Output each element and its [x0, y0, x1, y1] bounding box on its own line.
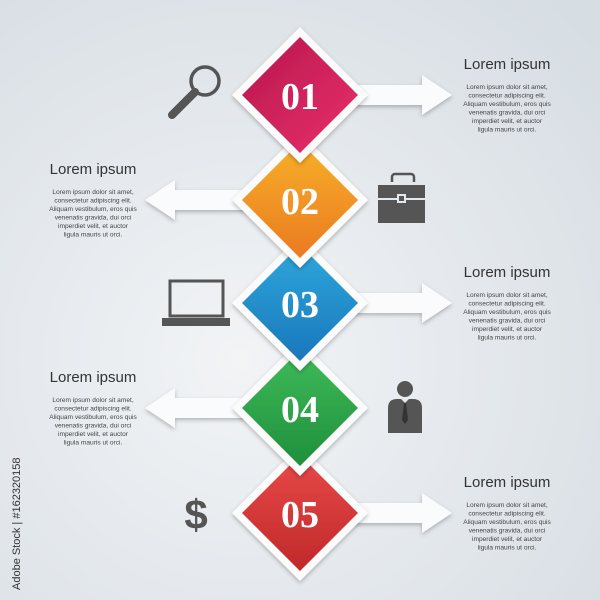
- text block 2: imperdiet velit, et auctor: [58, 223, 129, 230]
- text block 1: Lorem ipsum: [464, 56, 550, 73]
- text block 2: Aliquam vestibulum, eros quis: [49, 206, 137, 213]
- text block 3: venenatis gravida, dui orci: [469, 318, 546, 324]
- icon: magnifier: [172, 67, 219, 115]
- text block 1: consectetur adipiscing elit.: [468, 92, 546, 100]
- text block 1: ligula mauris ut orci.: [478, 126, 536, 134]
- arrow 3 right: [350, 283, 452, 323]
- diamond 02: [232, 132, 368, 268]
- text block 5: consectetur adipiscing elit.: [468, 510, 546, 518]
- text block 3: Lorem ipsum dolor sit amet,: [466, 292, 548, 299]
- text block 1: Lorem ipsum dolor sit amet,: [466, 84, 548, 91]
- text block 5: imperdiet velit, et auctor: [472, 536, 543, 543]
- diamond 04: [232, 340, 368, 476]
- text block 1: Aliquam vestibulum, eros quis: [463, 101, 551, 108]
- text block 4: consectetur adipiscing elit.: [54, 406, 132, 412]
- text block 4: [49, 369, 137, 446]
- text block 1: venenatis gravida, dui orci: [469, 110, 546, 116]
- text block 4: Lorem ipsum: [50, 369, 136, 386]
- text block 4: imperdiet velit, et auctor: [58, 431, 129, 438]
- text block 4: Aliquam vestibulum, eros quis: [49, 414, 137, 421]
- text block 3: [463, 264, 551, 342]
- watermark id: Adobe Stock | #162320158: [11, 457, 23, 590]
- arrow 1 right: [350, 75, 452, 115]
- diamond 03: [232, 235, 368, 371]
- text block 5: Lorem ipsum dolor sit amet,: [466, 502, 548, 509]
- text block 3: imperdiet velit, et auctor: [472, 326, 543, 333]
- diamond 05: [232, 445, 368, 581]
- icon: businessman: [388, 381, 422, 433]
- text block 3: ligula mauris ut orci.: [478, 334, 536, 342]
- text block 2: Lorem ipsum: [50, 161, 136, 178]
- icon: laptop: [162, 281, 230, 326]
- text block 3: Lorem ipsum: [464, 264, 550, 281]
- text block 4: Lorem ipsum dolor sit amet,: [52, 397, 134, 404]
- arrow 5 right: [350, 493, 452, 533]
- text block 2: ligula mauris ut orci.: [64, 232, 122, 238]
- text block 4: venenatis gravida, dui orci: [55, 422, 132, 430]
- diamond 01: [232, 27, 368, 163]
- text block 2: consectetur adipiscing elit.: [54, 198, 132, 204]
- diamond 03: 03: [281, 284, 319, 326]
- arrow 2 left: [145, 180, 250, 220]
- text block 1: [463, 56, 551, 134]
- text block 1: imperdiet velit, et auctor: [472, 118, 543, 125]
- text block 5: ligula mauris ut orci.: [478, 544, 536, 552]
- text block 5: [463, 474, 551, 552]
- text block 2: Lorem ipsum dolor sit amet,: [52, 189, 134, 196]
- arrow 4 left: [145, 388, 250, 428]
- text block 3: Aliquam vestibulum, eros quis: [463, 309, 551, 316]
- text block 2: [49, 161, 137, 238]
- text block 3: consectetur adipiscing elit.: [468, 300, 546, 308]
- diamond 04: 04: [281, 389, 319, 431]
- icon: briefcase: [378, 174, 425, 223]
- text block 2: venenatis gravida, dui orci: [55, 214, 132, 222]
- text block 4: ligula mauris ut orci.: [64, 440, 122, 446]
- text block 5: venenatis gravida, dui orci: [469, 528, 546, 534]
- text block 5: Lorem ipsum: [464, 474, 550, 491]
- diamond 01: 01: [281, 76, 319, 118]
- diamond 02: 02: [281, 181, 319, 223]
- diamond 05: 05: [281, 494, 319, 536]
- icon: dollar: $: [184, 491, 208, 538]
- text block 5: Aliquam vestibulum, eros quis: [463, 519, 551, 526]
